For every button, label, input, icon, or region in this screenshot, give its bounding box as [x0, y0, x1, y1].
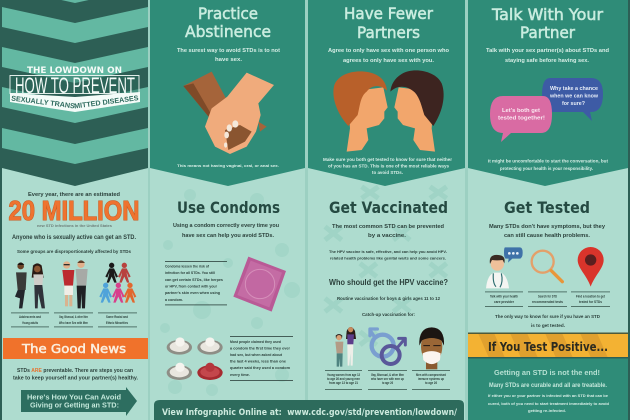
text: uncomfortable note: It might be uncomfortable to start the conversation, but: [488, 158, 609, 164]
text: vaccine captions: Men with compromised: [416, 373, 446, 377]
text: vaccine captions: from age 13 to age 21: [329, 381, 358, 385]
text: only way to know: is to get tested.: [531, 323, 565, 329]
panel: talk with your partner: [468, 0, 628, 186]
text: many stds no symptoms: Many STDs don't have symptoms, but they: [489, 224, 605, 230]
footer bar: View Infographic Online at: www.cdc.gov/std/prevention/lowdown/: [162, 408, 458, 418]
text: condoms lessen the risk: infection for all STDs. You still: [165, 270, 215, 275]
panel: get tested: [485, 198, 610, 329]
text: stds are preventable: [13, 368, 139, 382]
text: most people claimed: every time.: [230, 372, 250, 377]
heading: talk with your partner: [491, 5, 603, 42]
icon: speech bubble blue: [542, 78, 603, 121]
text: talk with your sex partner: [486, 48, 609, 64]
group: adolescents and young adults: Adolescents and: [19, 315, 41, 319]
text: vaccine captions: Young women from age 13: [327, 373, 360, 377]
text: hpv vaccine is safe: [329, 249, 448, 260]
text: most common std: The most common STD can be prevented: [332, 224, 444, 230]
text: tested captions: Search for STD: [538, 294, 558, 298]
text: vaccine captions: to age 26: [425, 381, 437, 385]
panel: the good news: The Good News: [21, 342, 126, 356]
icon: location pin: [578, 247, 604, 287]
heading: have fewer partners: [344, 4, 433, 42]
text: most people claimed: quarter said they used a condom: [230, 365, 290, 370]
text: some groups: Some groups are disproportionately affected by STDs: [17, 249, 132, 254]
text: condoms lessen the risk: Condoms lessen the risk of: [165, 264, 210, 268]
text: re-infection: getting re-infected.: [528, 408, 566, 413]
group: racial and ethnic minorities: [98, 263, 137, 327]
text: condoms lessen the risk: or HPV, from contact with your: [165, 284, 217, 288]
icon: man with mask: [419, 327, 444, 369]
heading: talk with your partner: Partner: [520, 23, 575, 42]
heading: practice abstinence: Abstinence: [185, 22, 271, 41]
panel: have fewer partners: [308, 0, 465, 186]
text: tested captions: [485, 292, 610, 307]
text: tested captions: Find a location to get: [576, 294, 606, 298]
text: talk with your sex partner: Talk with your sex partner(s) about STDs and: [486, 48, 609, 54]
text: using a condom: have sex can help you avoid STDs.: [182, 233, 275, 239]
icon: holding hands: [183, 72, 274, 154]
heading: practice abstinence: Practice: [198, 4, 258, 23]
text: re-infection: [488, 393, 610, 413]
arrow: how you can avoid: Giving or Getting an STD:: [30, 402, 119, 410]
group: adolescents and young adults: [11, 262, 49, 327]
text: tested captions: tested for STDs: [579, 300, 602, 304]
heading: get tested: Get Tested: [504, 198, 590, 217]
panel: if you test positive: [468, 332, 628, 420]
text: surest way: have sex.: [215, 57, 243, 63]
heading: use condoms: Use Condoms: [177, 198, 280, 217]
panel: the good news: [3, 338, 148, 359]
icon: woman and child: [335, 327, 356, 367]
text: agree: Agree to only have sex with one person who: [328, 48, 450, 54]
text: most people claimed: a condom the first time they ever: [230, 346, 290, 350]
text: get tested note: to avoid STDs.: [372, 170, 403, 175]
icon: speech bubble blue: when we can know: [549, 94, 598, 100]
heading: talk with your partner: Talk With Your: [491, 5, 603, 24]
text: most people claimed: Most people claimed they used: [230, 339, 281, 344]
text: stds are preventable: STDs ARE preventable. There are steps you can: [17, 368, 133, 374]
text: most common std: by a vaccine.: [368, 233, 407, 239]
text: vaccine captions: immune systems up: [418, 377, 444, 381]
text: re-infection: If either you or your partner is infected with an STD that can be: [488, 393, 609, 398]
text: get tested note: of you has an STD. This is one of the most reliable ways: [328, 164, 450, 168]
text: vaccine captions: Gay, Bisexual, & other Men: [371, 373, 404, 377]
heading: who should get the vaccine: Who should get the HPV vaccine?: [329, 277, 448, 287]
text: curable: Many STDs are curable and all are treatable.: [489, 383, 607, 389]
text: get tested note: Make sure you both get tested to know for sure that neither: [323, 157, 452, 162]
heading: practice abstinence: [185, 4, 271, 41]
text: condoms lessen the risk: [165, 261, 227, 305]
text: tested captions: care provider: [494, 300, 515, 304]
panel: practice abstinence: [150, 0, 305, 186]
text: talk with your sex partner: staying safe before having sex.: [505, 58, 590, 64]
text: anyone: Anyone who is sexually active can get an STD.: [12, 235, 136, 241]
text: many stds no symptoms: can still cause health problems.: [504, 233, 591, 239]
text: tested captions: recommended tests: [532, 300, 563, 304]
text: uncomfortable note: protecting your health is your responsibility.: [500, 166, 593, 171]
title: HOW TO PREVENT: [15, 73, 135, 98]
panel: get vaccinated: [325, 198, 450, 390]
icon: magnifying glass: [532, 251, 562, 282]
heading: have fewer partners: Partners: [357, 23, 420, 42]
number: 20 million: 20 MILLION: [8, 195, 140, 226]
text: new infections: new STD infections in the United States: [37, 224, 112, 228]
icon: gender symbols: [370, 329, 405, 364]
text: condoms lessen the risk: partner's skin even when using: [165, 290, 221, 295]
footer bar: [154, 400, 464, 420]
text: vaccine captions: to age 26: [382, 381, 393, 385]
text: get tested note: [323, 157, 452, 175]
title: THE LOWDOWN ON: [27, 66, 122, 76]
group: adolescents and young adults: Young adults: [22, 321, 38, 325]
group: gay and bisexual men: Who have Sex with Men: [59, 321, 88, 325]
text: hpv vaccine is safe: related health problems like genital warts and some cancers.: [330, 256, 446, 260]
text: uncomfortable note: [488, 158, 609, 171]
text: using a condom: [173, 223, 279, 239]
icon: speech bubble pink: Let's both get: [502, 108, 540, 114]
group: gay and bisexual men: [54, 260, 93, 327]
icon: doctor with speech bubble: [486, 247, 523, 288]
text: vaccine captions: who have sex with men up: [370, 377, 404, 381]
text: not the end: Getting an STD is not the end!: [494, 368, 600, 377]
text: hpv vaccine is safe: The HPV vaccine is safe, effective, and can help you avoid HPV-: [329, 249, 448, 254]
text: most people claimed: [230, 336, 293, 381]
text: surest way: The surest way to avoid STDs is to not: [177, 48, 280, 54]
panel: prevalence: [8, 192, 140, 327]
text: most common std: [332, 224, 444, 239]
title: [10, 66, 140, 112]
text: most people claimed: the last 4 weeks, less than one: [230, 358, 287, 364]
icon: four condoms: [167, 337, 223, 380]
group: racial and ethnic minorities: Some Racial and: [106, 315, 128, 319]
text: routine vaccination: Routine vaccination for boys & girls ages 11 to 12: [337, 296, 441, 301]
icon: speech bubble pink: tested together!: [498, 116, 545, 122]
icon: speech bubble blue: Why take a chance: [550, 86, 598, 92]
text: condoms lessen the risk: can get certain STDs, like herpes: [165, 277, 224, 282]
icon: condom package: [233, 257, 286, 312]
text: surest way: [177, 48, 280, 63]
text: using a condom: Using a condom correctly every time you: [173, 223, 279, 229]
icon: speech bubble pink: [490, 96, 552, 142]
text: every year: Every year, there are an estimated: [28, 192, 120, 198]
text: re-infection: cured, both of you need to start treatment immediately to avoid: [488, 401, 610, 406]
text: vaccine captions: to age 26 and young men: [327, 377, 360, 381]
text: catch-up vaccination: Catch-up vaccination for:: [362, 312, 416, 317]
heading: get vaccinated: Get Vaccinated: [329, 198, 448, 217]
title: SEXUALLY TRANSMITTED DISEASES: [11, 96, 138, 108]
text: only way to know: [495, 314, 600, 329]
heading: have fewer partners: Have Fewer: [344, 4, 433, 23]
text: tested captions: Talk with your health: [490, 294, 518, 298]
panel: if you test positive: If You Test Positive...: [488, 340, 608, 354]
arrow: how you can avoid: [21, 387, 137, 416]
arrow: how you can avoid: Here's How You Can Avoid: [27, 394, 121, 402]
panel: use condoms: [165, 198, 293, 381]
text: only way to know: The only way to know for sure if you have an STD: [495, 314, 600, 320]
icon: two faces: [333, 70, 444, 152]
panel: title chevrons: [2, 0, 148, 186]
text: most people claimed: had sex, but when asked about: [230, 352, 283, 357]
group: gay and bisexual men: Gay, Bisexual, & other Men: [59, 315, 88, 319]
text: agree: [328, 48, 450, 64]
text: vaccine captions: [325, 370, 450, 390]
group: racial and ethnic minorities: Ethnic Minorities: [106, 321, 128, 325]
text: agree: agrees to only have sex with you.: [343, 58, 435, 64]
text: many stds no symptoms: [489, 224, 605, 239]
text: condoms lessen the risk: a condom.: [165, 297, 183, 302]
text: abstinence note: This means not having vaginal, oral, or anal sex.: [177, 163, 279, 168]
icon: speech bubble blue: for sure?: [562, 101, 585, 107]
text: stds are preventable: take to keep yourself and your partner(s) healthy.: [13, 376, 139, 382]
